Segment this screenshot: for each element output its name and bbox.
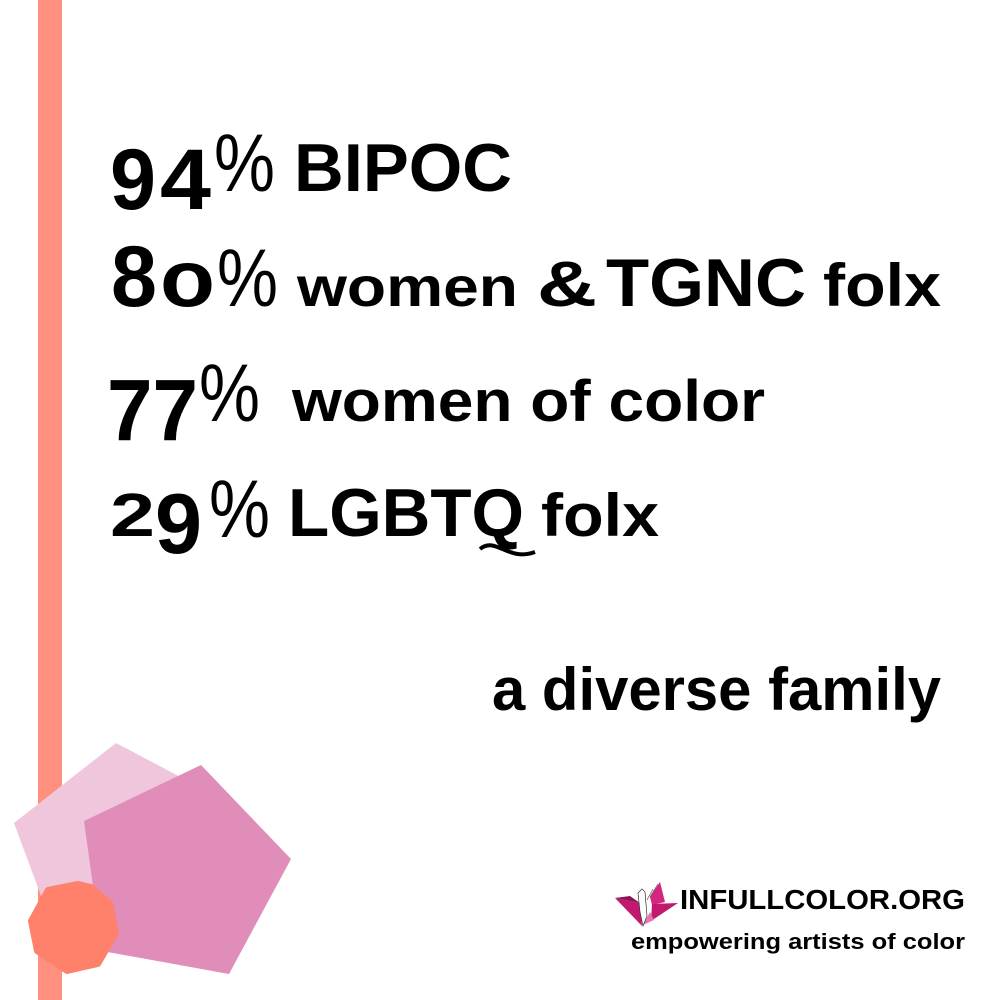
decorative shapes — [14, 743, 291, 974]
stat: 94% BIPOC: % — [214, 118, 275, 209]
stat: 80% women & TGNC folx: o — [160, 234, 215, 323]
stat: 80% women & TGNC folx: % — [217, 233, 278, 324]
stat: 29% LGBTQ folx: LGBTQ — [288, 475, 524, 551]
stat: 29% LGBTQ folx: 2 — [110, 481, 155, 549]
coral octagon — [31, 884, 116, 971]
stat: 80% women & TGNC folx: & — [537, 248, 597, 320]
stat: 94% BIPOC — [110, 118, 512, 228]
stat: 29% LGBTQ folx: 9 — [155, 477, 202, 572]
stat: 77% women of color: % — [199, 348, 260, 439]
stat: 29% LGBTQ folx — [110, 464, 659, 572]
stat: 80% women & TGNC folx — [111, 229, 941, 325]
vertical coral bar — [38, 0, 62, 1000]
stat: 80% women & TGNC folx: TGNC — [606, 245, 806, 321]
stat: 77% women of color: women of color — [291, 369, 765, 434]
tagline: a diverse family: a diverse family — [492, 656, 942, 723]
logo subtitle: empowering artists of color: empowering artists of color — [631, 929, 965, 954]
dark pink pentagon — [84, 765, 291, 974]
stat: 29% LGBTQ folx: folx — [541, 482, 659, 549]
stat: 94% BIPOC: 9 — [110, 132, 156, 228]
logo: origami crane — [615, 882, 678, 926]
stat: 80% women & TGNC folx: 8 — [111, 229, 157, 325]
stat: 94% BIPOC: 4 — [160, 132, 211, 228]
stat: 77% women of color — [107, 348, 765, 459]
logo text: INFULLCOLOR.ORG: INFULLCOLOR.ORG — [680, 884, 965, 915]
light pink pentagon — [14, 743, 205, 912]
stat: 94% BIPOC: BIPOC — [294, 130, 512, 206]
stat: 80% women & TGNC folx: women — [296, 255, 518, 318]
stat: 29% LGBTQ folx: % — [209, 464, 270, 555]
stat: 80% women & TGNC folx: folx — [823, 252, 941, 319]
stat: 77% women of color: 77 — [107, 362, 198, 459]
